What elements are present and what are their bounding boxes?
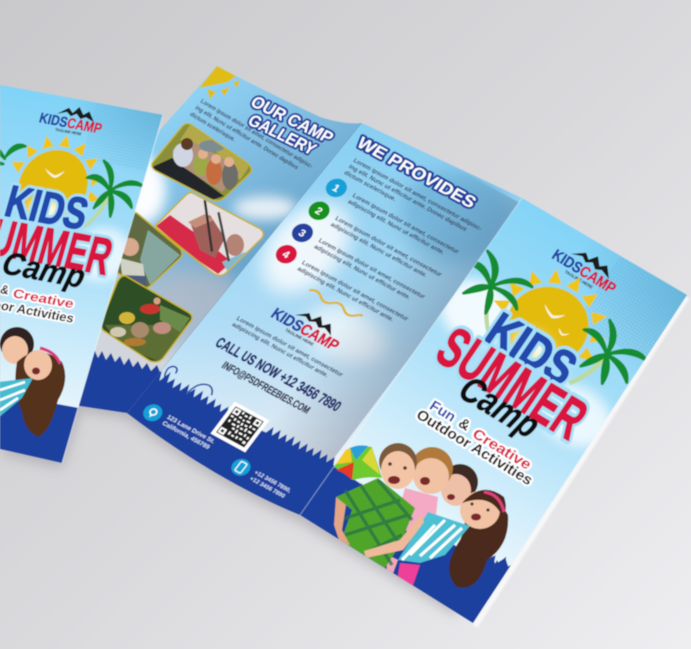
- numbered item 3: [291, 223, 426, 300]
- address: 123 Lane Drive St.: [165, 414, 216, 445]
- email: INFO@PSDFREEBIES.COM: [219, 360, 312, 416]
- numbered item 1: [325, 178, 460, 254]
- edge glow: [475, 297, 687, 626]
- numbered item 3: adipiscing elit. Nunc ut efficitur ante.: [312, 244, 412, 301]
- clouds: [438, 273, 513, 350]
- title: kids summer camp: [0, 172, 128, 299]
- numbered item 1: Lorem ipsum dolor sit amet, consectetur: [351, 192, 461, 256]
- halftone corner: [608, 252, 687, 363]
- palm tree right: [568, 318, 647, 386]
- logo: kidscamp: [551, 248, 617, 292]
- logo: kidscamp: TAGLINE HERE: [54, 128, 82, 137]
- illustration: two children: [0, 327, 65, 437]
- title: kids summer camp: KIDS: [0, 177, 93, 240]
- child 1 boy: [334, 443, 424, 568]
- phone numbers: +12 3456 7890,: [253, 470, 292, 494]
- child 2: [396, 447, 453, 545]
- squiggle divider: [307, 288, 362, 320]
- heading: we provides: WE PROVIDES: [353, 134, 480, 212]
- gallery intro text: dictum scelerisque.: [188, 112, 237, 143]
- title: kids summer camp: KIDS: [0, 177, 93, 240]
- qr code: [211, 401, 269, 452]
- grass and footer: [300, 466, 512, 624]
- numbered item 4: 4: [280, 249, 292, 261]
- address: California, 456789: [161, 420, 212, 451]
- numbered item 1: adipiscing elit. Nunc ut efficitur ante.: [346, 199, 446, 256]
- call us now: CALL US NOW +12 3456 7890: [212, 335, 344, 415]
- numbered item 4: Lorem ipsum dolor sit amet, consectetur: [300, 260, 410, 323]
- tagline: fun and creative: Outdoor Activities: [413, 407, 535, 489]
- sun illustration: [0, 126, 116, 231]
- numbered item 4: adipiscing elit. Nunc ut efficitur ante.: [296, 266, 395, 323]
- grass right tuft: [484, 554, 510, 572]
- numbered item 2: 2: [312, 206, 324, 218]
- logo: kidscamp: TAGLINE HERE: [284, 328, 315, 347]
- fold highlight lines: [300, 198, 522, 515]
- icon: location pin: [142, 404, 163, 422]
- child 3: [441, 464, 478, 506]
- numbered item 3: 3: [296, 228, 308, 240]
- numbered item 4: [275, 244, 409, 322]
- tagline: fun and creative: [0, 276, 80, 326]
- logo: kidscamp: KIDSCAMP: [267, 305, 343, 355]
- palm tree left: [462, 248, 534, 332]
- numbered item 2: [308, 200, 442, 278]
- brochure drop shadows: [0, 380, 470, 615]
- photo: kayak: [154, 191, 265, 277]
- title: kids summer camp: Camp: [0, 245, 89, 295]
- tagline: fun and creative: &: [455, 416, 473, 435]
- logo: kidscamp: [270, 307, 340, 349]
- gallery intro text: ing elit. Nunc ut efficitur ante. Donec dapibus: [193, 105, 300, 171]
- icon: sun corner: [199, 66, 239, 99]
- title: kids summer camp: Camp: [452, 367, 548, 446]
- logo: kidscamp: TAGLINE HERE: [564, 269, 594, 290]
- title: kids summer camp: KIDS: [477, 303, 586, 396]
- gallery grass: [78, 350, 161, 414]
- phone numbers: +12 3456 7890: [248, 476, 287, 500]
- halftone corner: [35, 78, 184, 196]
- panel: front cover: [300, 198, 688, 624]
- front grass over kids edge: [488, 557, 508, 605]
- intro text: dictum scelerisque.: [342, 170, 398, 203]
- title: kids summer camp: KIDS: [477, 303, 586, 396]
- child 4 head: [460, 490, 506, 529]
- logo: kidscamp: [37, 100, 106, 140]
- left brochure edge line: [62, 115, 163, 463]
- grass and footer: [126, 365, 336, 516]
- panel: gallery (inner left): [78, 66, 362, 414]
- sun illustration: [493, 268, 608, 364]
- heading: our camp gallery: OUR CAMP: [247, 93, 337, 147]
- panel: we provides (inner middle): [126, 122, 522, 516]
- clouds: [118, 156, 166, 224]
- photo: child at tent: [116, 211, 184, 289]
- logo: kidscamp: KIDSCAMP: [38, 109, 104, 137]
- grass and footer: [0, 361, 107, 501]
- gallery intro text: Lorem ipsum dolor sit amet, consectetur adipisc-: [199, 99, 314, 170]
- logo: kidscamp: KIDSCAMP: [549, 247, 619, 297]
- tagline: fun and creative: Fun: [426, 398, 458, 425]
- palm trees: [0, 138, 148, 236]
- intro text: ing elit. Nunc ut efficitur ante. Donec dapibus: [347, 163, 469, 233]
- address text: adipiscing elit. Nunc ut efficitur ante.: [230, 321, 330, 379]
- photo: group of children: [100, 274, 194, 364]
- numbered item 1: 1: [330, 183, 342, 195]
- numbered item 2: adipiscing elit. Nunc ut efficitur ante.: [329, 221, 429, 279]
- tagline: fun and creative: Creative: [469, 426, 534, 473]
- numbered item 2: Lorem ipsum dolor sit amet, consectetur: [334, 215, 444, 279]
- icon: phone: [230, 458, 252, 476]
- numbered item 3: Lorem ipsum dolor sit amet, consectetur: [317, 237, 427, 301]
- heading: our camp gallery: GALLERY: [245, 111, 320, 158]
- child 4 long hair: [449, 494, 508, 588]
- title: kids summer camp: SUMMER: [425, 316, 598, 452]
- clouds: [66, 223, 138, 286]
- illustration: four laughing children: [329, 443, 508, 588]
- intro text: Lorem ipsum dolor sit amet, consectetur adipisc-: [352, 157, 483, 232]
- clouds: [250, 192, 362, 302]
- panel: second brochure cover: [0, 59, 192, 501]
- photo: family in tent: [150, 122, 253, 202]
- title: kids summer camp: SUMMER: [425, 316, 598, 452]
- child 4 dress and legs: [386, 512, 470, 588]
- address text: Lorem ipsum dolor sit amet, consectetur: [235, 315, 345, 379]
- umbrella: [329, 445, 382, 480]
- tagline: fun and creative: Creative: [11, 286, 76, 311]
- title: kids summer camp: [434, 308, 590, 445]
